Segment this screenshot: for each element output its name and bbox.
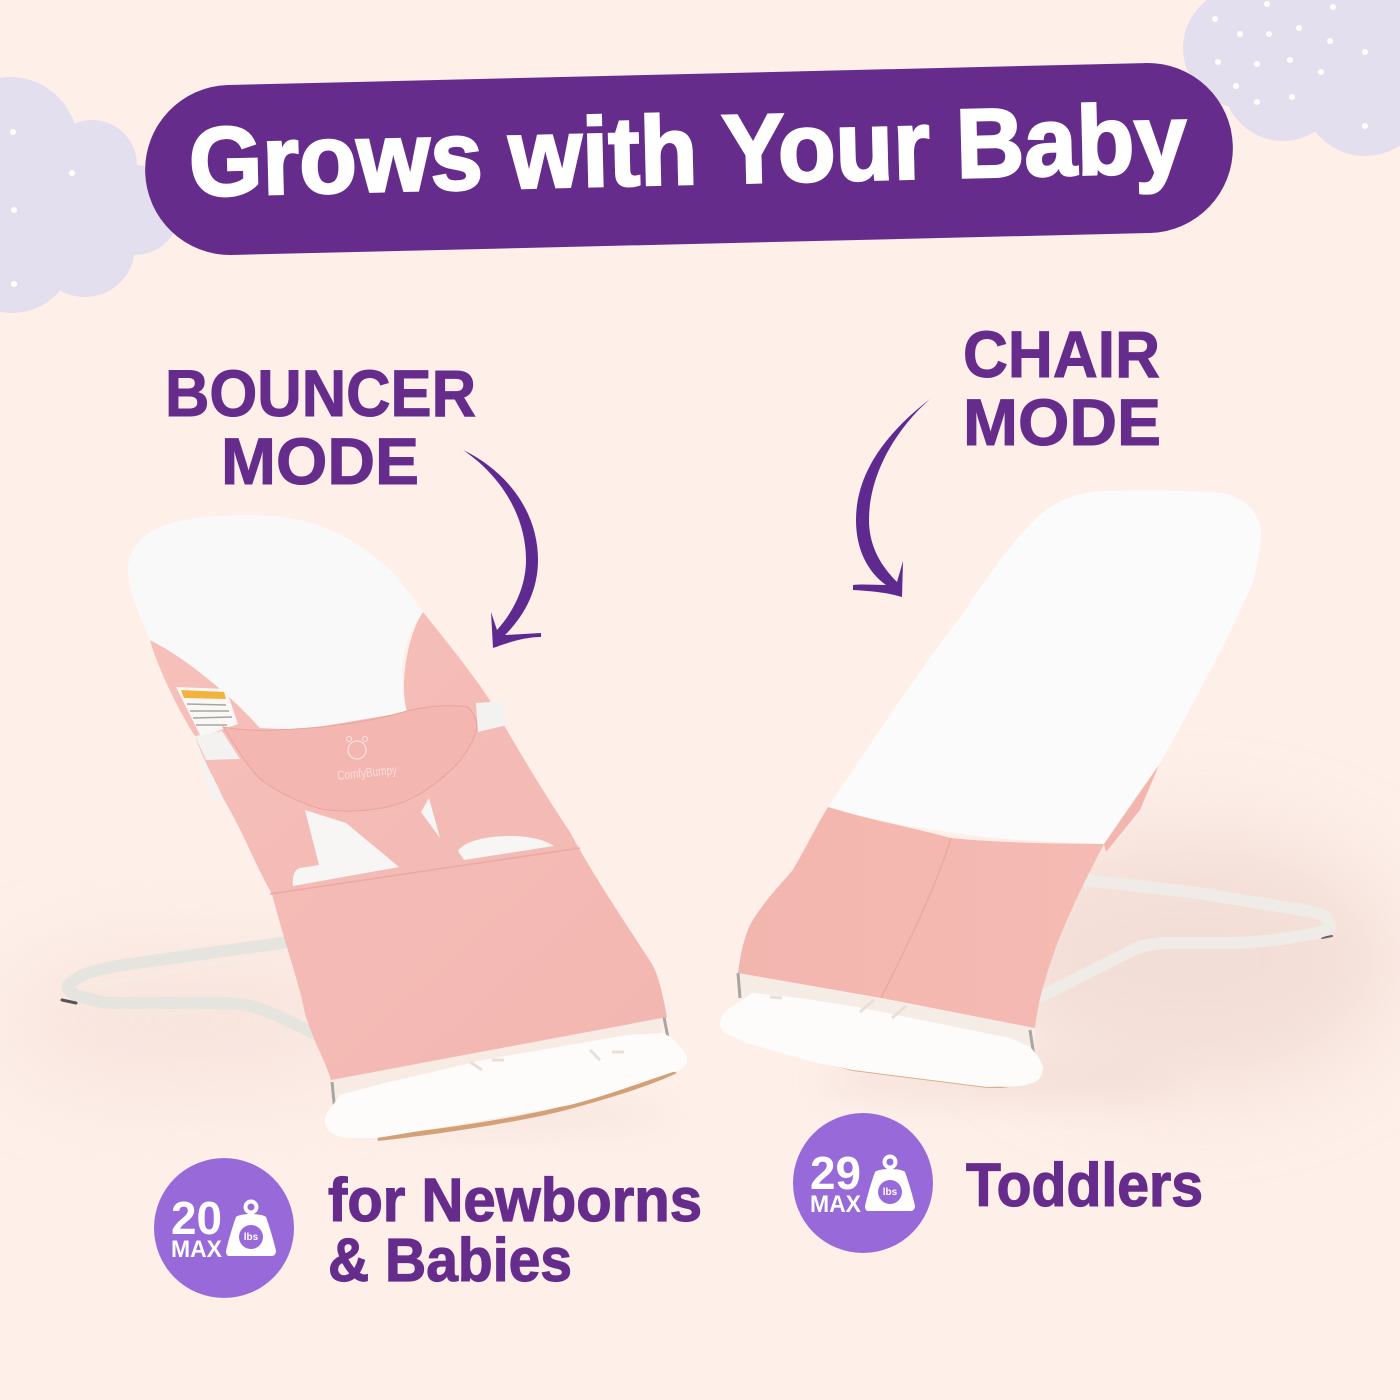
brand mark: ComfyBumpy	[336, 762, 398, 783]
mesh backrest: chair	[828, 490, 1261, 844]
icon: weight: lbs	[883, 1187, 898, 1198]
cloud: top right	[1183, 0, 1400, 156]
mesh headrest: bouncer	[128, 515, 423, 730]
bouncer mode heading: BOUNCER	[165, 356, 476, 430]
bouncer seat	[62, 515, 687, 1141]
mesh cut-outs: bouncer	[293, 798, 554, 886]
arrow: bouncer	[463, 450, 541, 648]
label: newborns: & Babies	[328, 1226, 572, 1294]
warning label	[176, 687, 238, 737]
cloud: top left	[0, 77, 180, 313]
bouncer mode heading	[165, 356, 476, 498]
label: newborns	[328, 1166, 702, 1294]
bouncer mode heading: MODE	[221, 424, 419, 498]
badge: 29 lbs max: MAX	[810, 1191, 861, 1218]
tray: bouncer	[325, 1017, 687, 1141]
floor shadows	[0, 830, 1400, 1133]
brand mark	[336, 736, 398, 783]
pillow	[223, 706, 477, 811]
fabric: bouncer	[150, 612, 667, 1080]
seam: chair	[881, 838, 951, 998]
icon: weight: lbs	[244, 1232, 259, 1243]
chair mode heading: CHAIR	[963, 317, 1160, 391]
arrow: chair	[853, 399, 930, 597]
mesh sliver: bouncer	[195, 742, 225, 802]
label: newborns: for Newborns	[328, 1166, 702, 1234]
frame: bouncer	[62, 941, 328, 1040]
badge: 20 lbs max: 20	[171, 1192, 222, 1244]
seam: bouncer	[270, 848, 580, 894]
fabric side: chair	[1104, 765, 1159, 852]
title banner	[143, 61, 1235, 257]
chair mode heading	[963, 317, 1161, 459]
badge: 29 lbs max	[793, 1113, 933, 1253]
title: Grows with Your Baby	[188, 83, 1188, 217]
straps	[195, 701, 507, 760]
fabric: chair	[738, 807, 1104, 1028]
frame: chair	[1038, 880, 1332, 998]
label: toddlers: Toddlers	[966, 1151, 1203, 1219]
badge: 29 lbs max: 29	[810, 1147, 861, 1199]
chair mode heading: MODE	[963, 385, 1161, 459]
tray: chair	[720, 973, 1043, 1088]
badge: 20 lbs max	[154, 1158, 294, 1298]
chair seat	[720, 490, 1332, 1088]
badge: 20 lbs max: MAX	[171, 1236, 222, 1263]
